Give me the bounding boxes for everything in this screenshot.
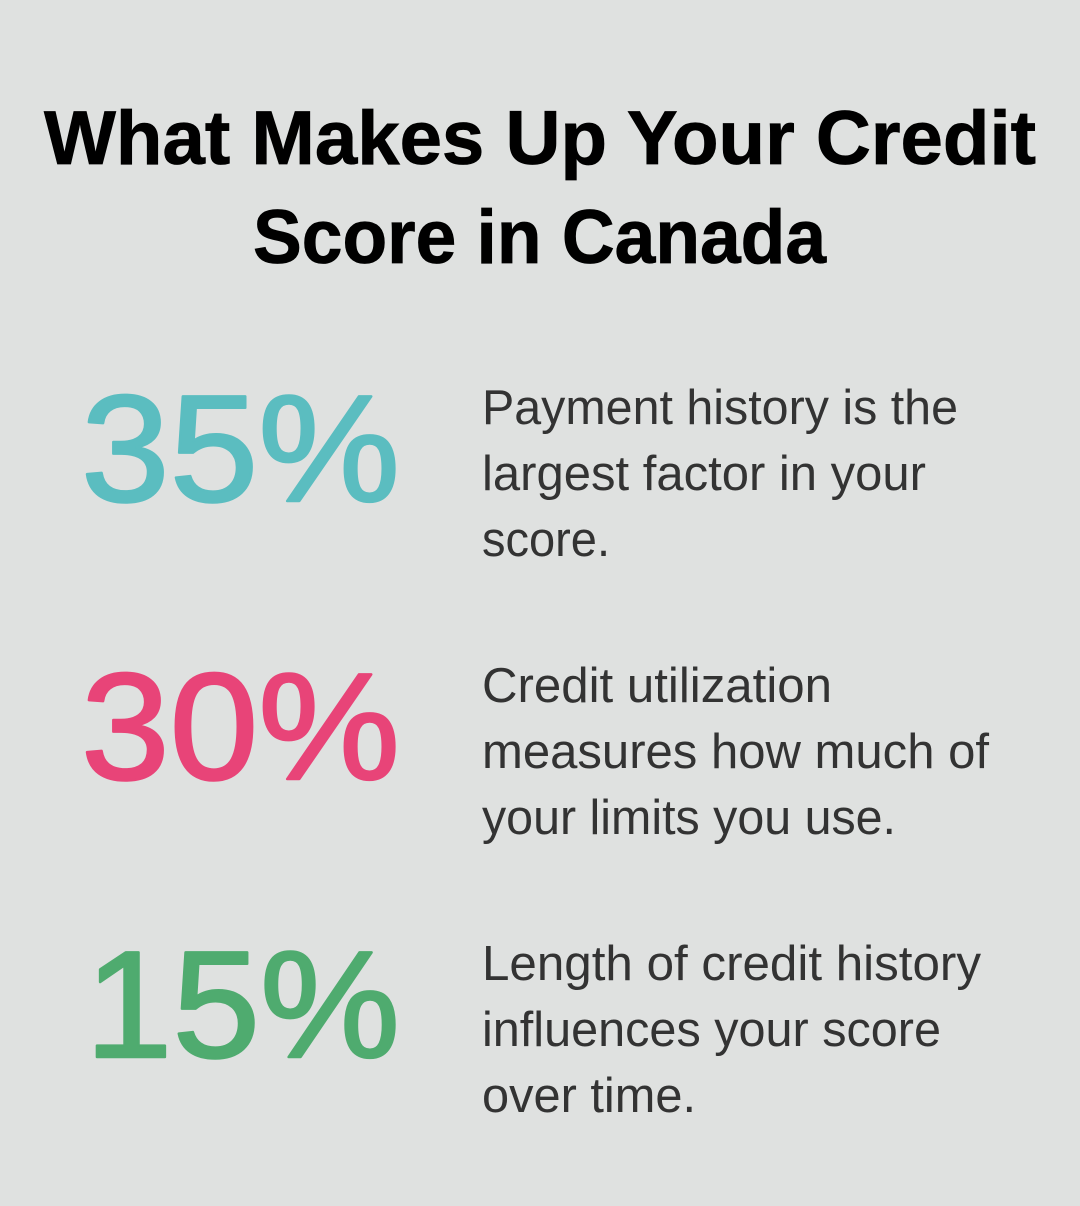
title: What Makes Up Your Credit <box>44 96 1036 181</box>
description: length of credit history: over time. <box>482 1069 696 1123</box>
description: credit utilization <box>482 659 989 845</box>
description: payment history: score. <box>482 513 610 567</box>
stat number: 35%: 35% <box>81 364 400 534</box>
description: payment history: largest factor in your <box>482 447 926 501</box>
description: payment history: Payment history is the <box>482 381 958 435</box>
description: payment history <box>482 381 958 567</box>
title <box>44 96 1036 280</box>
description: credit utilization: Credit utilization <box>482 659 832 713</box>
stat number: 30%: 30% <box>81 642 400 812</box>
stat row: payment history <box>81 364 958 567</box>
description: credit utilization: your limits you use. <box>482 791 896 845</box>
stat number: 15%: 15% <box>85 920 400 1090</box>
title: Score in Canada <box>253 195 827 280</box>
stat row: credit utilization <box>81 642 989 845</box>
description: length of credit history <box>482 937 982 1123</box>
description: credit utilization: measures how much of <box>482 725 989 779</box>
description: length of credit history: influences your score <box>482 1003 941 1057</box>
stat row: length of credit history <box>85 920 982 1123</box>
description: length of credit history: Length of credit history <box>482 937 982 991</box>
